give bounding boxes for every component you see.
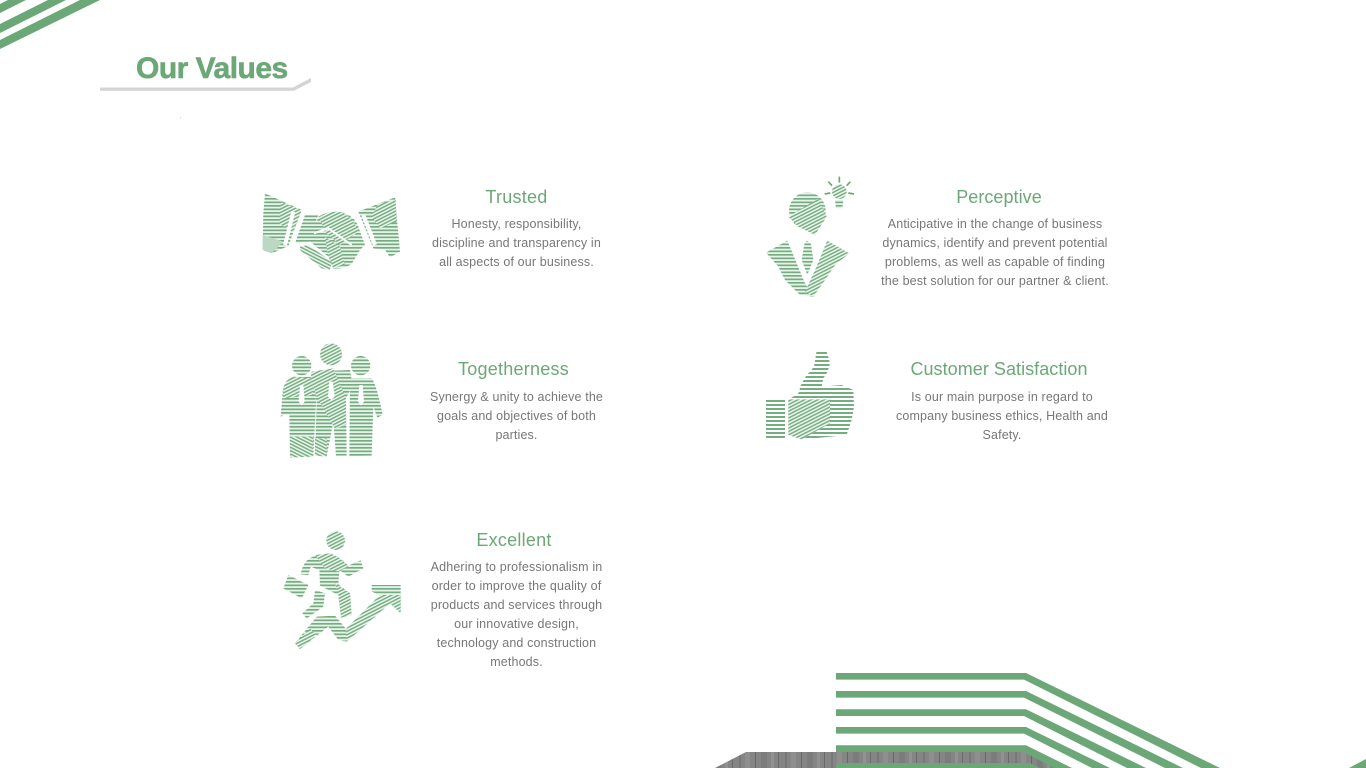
wood strip (715, 752, 1060, 768)
text: Trusted: Trusted (485, 187, 548, 207)
icon: businessman with light bulb (766, 177, 854, 297)
text: Trusted: all aspects of our business. (439, 255, 594, 269)
icon: running man and rising arrow (283, 531, 401, 649)
icon: thumbs up (766, 351, 854, 439)
text: Excellent: Adhering to professionalism in (431, 560, 602, 574)
text: Excellent (430, 530, 602, 669)
text: Excellent: order to improve the quality of (432, 579, 601, 593)
icon: handshake (263, 193, 400, 270)
text: Excellent: our innovative design, (454, 617, 579, 631)
text: Perceptive (881, 187, 1109, 288)
title: Our Values (136, 52, 288, 85)
bottom chevron stripes (836, 673, 1366, 768)
text: Togetherness (430, 359, 603, 442)
text: Togetherness: Synergy & unity to achieve the (430, 390, 603, 404)
top-left diagonal stripes (0, 0, 100, 49)
text: Excellent: methods. (490, 655, 543, 669)
text: Perceptive: dynamics, identify and prevent potential (882, 236, 1108, 250)
text: Customer Satisfaction (896, 359, 1108, 442)
text: Togetherness: goals and objectives of both (437, 409, 596, 423)
text: Togetherness: parties. (495, 428, 538, 442)
text: Customer Satisfaction: company business ethics, Health and (896, 409, 1108, 423)
text: Customer Satisfaction: Safety. (983, 428, 1021, 442)
text: Perceptive: the best solution for our partner & client. (881, 274, 1109, 288)
text: Trusted (432, 187, 601, 269)
text: Excellent: products and services through (431, 598, 602, 612)
text: Perceptive: Anticipative in the change of business (888, 217, 1102, 231)
text: Perceptive: Perceptive (956, 187, 1042, 207)
text: Trusted: discipline and transparency in (432, 236, 601, 250)
icon: team of three people (281, 343, 383, 458)
text: Customer Satisfaction: Is our main purpose in regard to (911, 390, 1093, 404)
text: Excellent: technology and construction (437, 636, 596, 650)
text: Trusted: Honesty, responsibility, (451, 217, 582, 231)
title underline (100, 78, 311, 91)
text: Togetherness: Togetherness (458, 359, 569, 379)
text: Excellent: Excellent (476, 530, 552, 550)
text: Customer Satisfaction: Customer Satisfaction (910, 359, 1088, 379)
small dot (180, 117, 181, 118)
text: Perceptive: problems, as well as capable of finding (885, 255, 1105, 269)
